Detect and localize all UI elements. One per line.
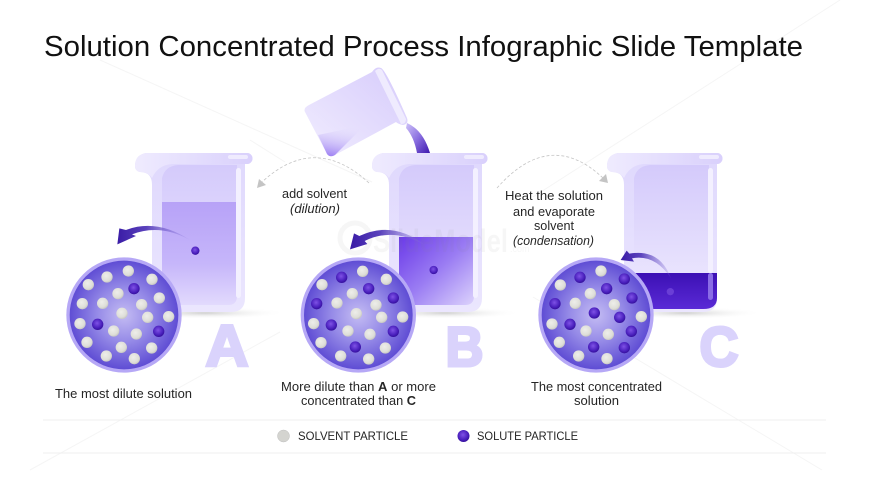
title: Solution Concentrated Process Infographic Slide Template [44, 31, 803, 63]
pouring beaker [304, 68, 430, 156]
caption C: solution [574, 393, 619, 408]
magnified particles A [66, 226, 199, 373]
label: heat the solution [505, 188, 603, 248]
dot A [191, 246, 199, 255]
liquid stream [406, 123, 430, 153]
dot B [429, 266, 438, 274]
legend [278, 429, 578, 443]
label: add solvent: add solvent [282, 186, 347, 201]
magnified particles C [538, 251, 674, 373]
letter A: A [206, 314, 248, 379]
shadow [369, 307, 521, 319]
label: heat the solution: solvent [534, 218, 574, 233]
caption B [281, 379, 436, 408]
arrow A [117, 226, 190, 244]
legend: solute particle: SOLUTE PARTICLE [477, 429, 578, 443]
arrow: condensation arc [497, 155, 608, 188]
beaker A [123, 153, 287, 319]
label: heat the solution: and evaporate [513, 204, 595, 219]
watermark: SlideModel [373, 223, 508, 259]
label: heat the solution: Heat the solution [505, 188, 603, 203]
arrow C [621, 251, 671, 278]
arrow: dilution arc [257, 158, 369, 188]
letter C: C [700, 315, 738, 378]
caption C: The most concentrated [531, 379, 662, 394]
legend: solvent particle: SOLVENT PARTICLE [298, 429, 408, 443]
caption A: The most dilute solution [55, 386, 192, 401]
caption B: More dilute than A or more [281, 379, 436, 394]
beaker B [369, 153, 521, 319]
label: add solvent: (dilution) [290, 201, 340, 216]
shadow [123, 307, 287, 319]
shadow [607, 307, 763, 319]
watermark: .com [510, 244, 530, 254]
letter B: B [446, 315, 484, 378]
label: add solvent [282, 186, 347, 216]
arrow B [350, 230, 426, 249]
dot C [667, 288, 674, 295]
caption C [531, 379, 662, 408]
beaker C [607, 153, 763, 319]
magnified particles B [301, 230, 438, 373]
caption B: concentrated than C [301, 393, 416, 408]
label: heat the solution: (condensation) [513, 233, 594, 248]
